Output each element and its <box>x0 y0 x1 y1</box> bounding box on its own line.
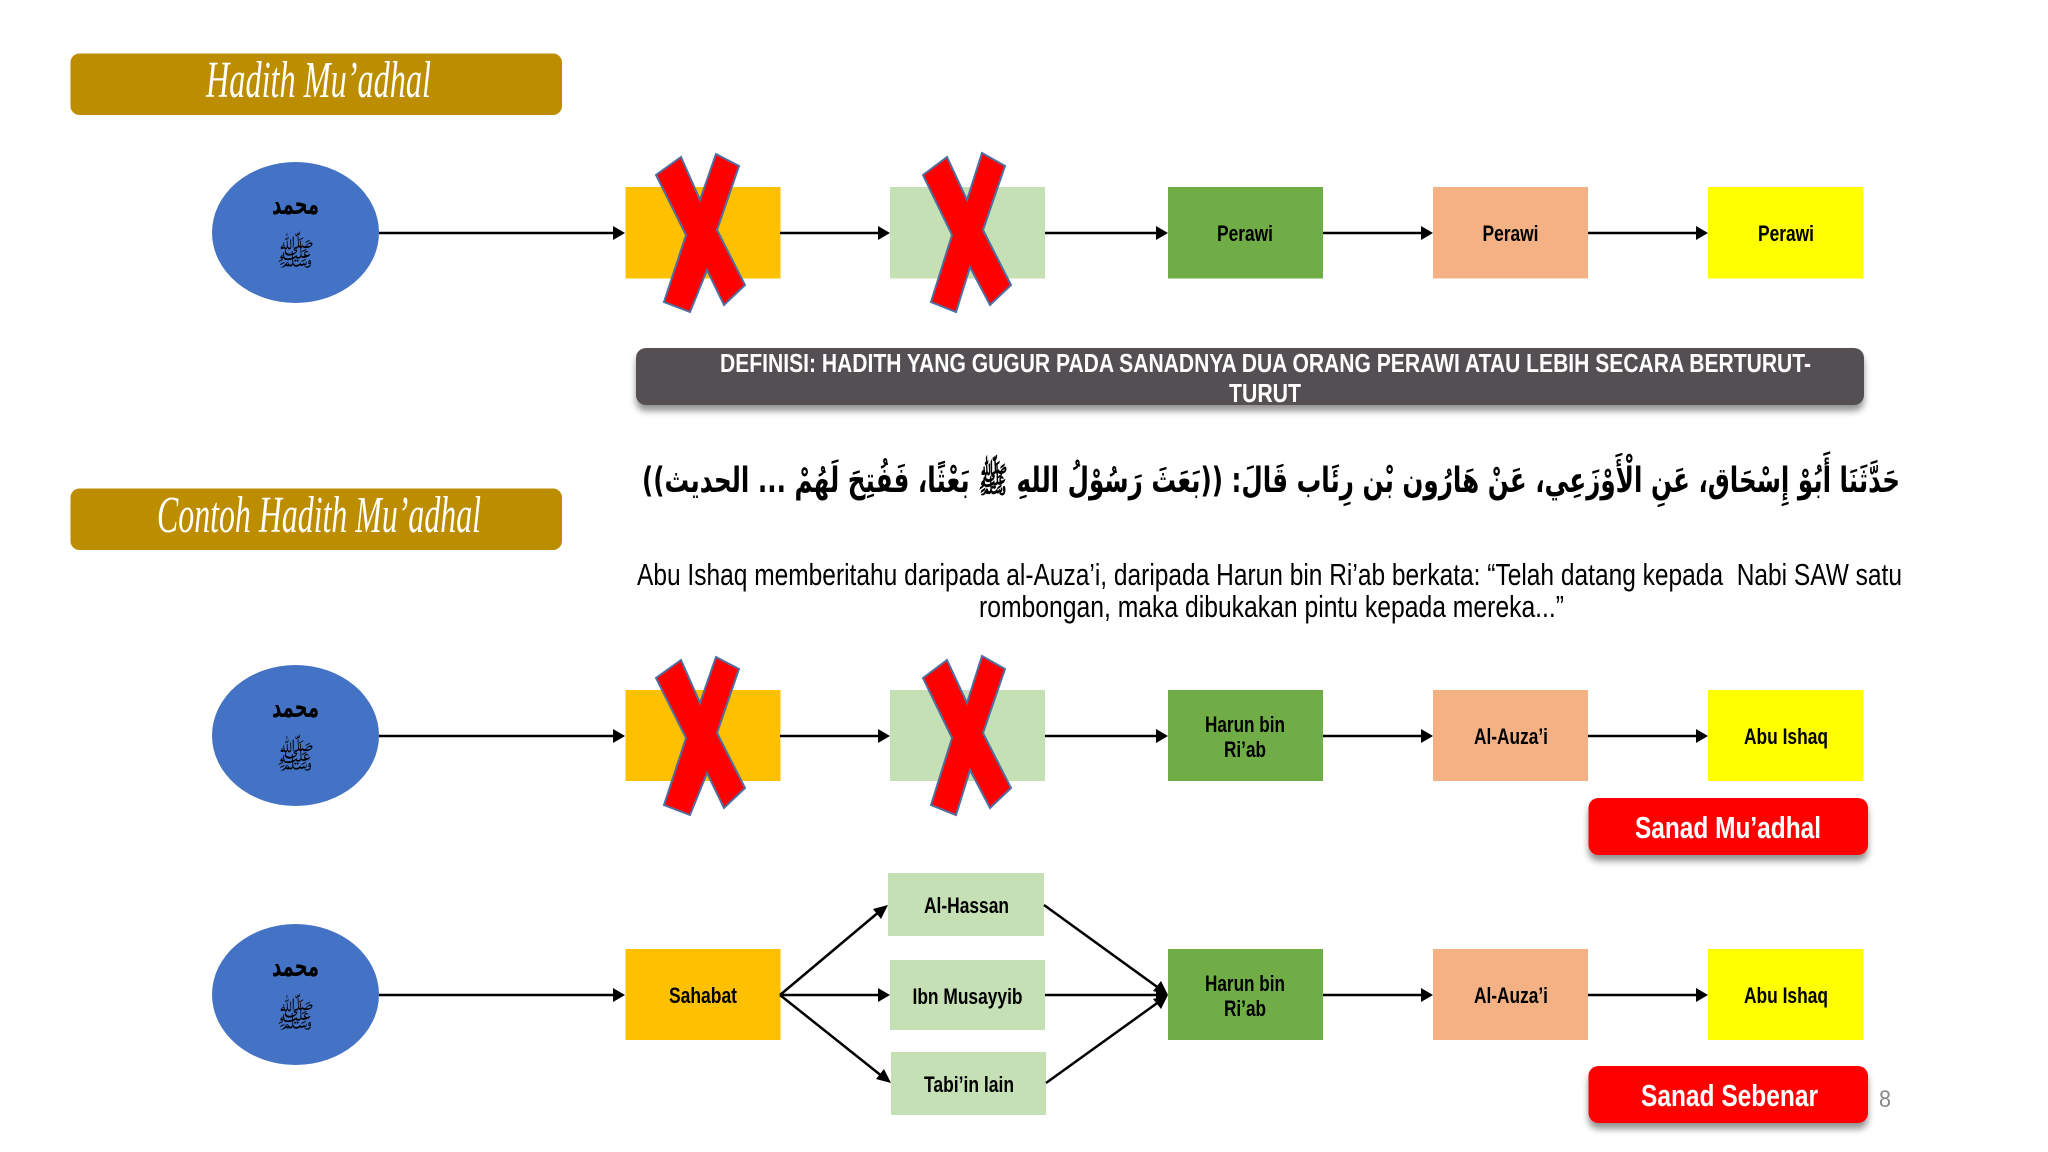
arrow: Al-Auza'i to Abu Ishaq <box>1588 729 1708 743</box>
definition bar <box>636 348 1864 408</box>
arrow: Sahabat to Ibn Musayyib <box>780 988 890 1002</box>
arrow: Tabi'in lain to Harun <box>1046 995 1168 1083</box>
arrow: Prophet to first narrator <box>379 729 625 743</box>
box: Sahabat: Sahabat <box>669 983 737 1008</box>
arrow: Sahabat to Al-Hassan <box>780 905 888 995</box>
icon: Prophet Muhammad circle: محمد <box>272 949 319 983</box>
title: Hadith Mu'adhal <box>70 52 562 115</box>
box: Perawi peach <box>1433 187 1588 278</box>
arrow: Sahabat to Tabi'in lain <box>780 995 891 1083</box>
icon: Prophet Muhammad circle: ﷺ <box>276 231 315 273</box>
icon: Prophet Muhammad circle: ﷺ <box>276 734 315 776</box>
box: Harun bin Ri'ab: Harun bin <box>1205 971 1285 996</box>
arrow: Al-Hassan to Harun <box>1044 905 1168 995</box>
box: Abu Ishaq <box>1708 949 1864 1040</box>
box: Tabi'in lain: Tabi’in lain <box>924 1072 1014 1097</box>
box: Al-Hassan <box>888 873 1044 936</box>
box: Al-Auza'i <box>1433 690 1588 781</box>
arrow: Al-Auza'i to Abu Ishaq <box>1588 988 1708 1002</box>
icon: red cross 2 <box>923 153 1011 312</box>
box: Harun bin Ri'ab: Ri’ab <box>1224 737 1266 762</box>
arrow: narrator 1 to 2 <box>780 226 890 240</box>
box: Perawi green <box>1168 187 1323 278</box>
label: Sanad Sebenar: Sanad Sebenar <box>1641 1078 1818 1113</box>
box: Ibn Musayyib: Ibn Musayyib <box>912 984 1022 1009</box>
arrow: narrator 3 to 4 <box>1323 226 1433 240</box>
translation text: rombongan, maka dibukakan pintu kepada mereka...” <box>979 589 1564 624</box>
box: Abu Ishaq <box>1708 690 1864 781</box>
icon: Prophet Muhammad circle: محمد <box>272 690 319 724</box>
title: Contoh Hadith Mu'adhal <box>70 487 562 550</box>
box: Al-Auza'i: Al-Auza’i <box>1474 983 1548 1008</box>
box: Perawi yellow: Perawi <box>1758 221 1814 246</box>
arrow: Harun to Al-Auza'i <box>1323 988 1433 1002</box>
label: Sanad Sebenar <box>1588 1066 1868 1123</box>
box: Harun bin Ri'ab: Harun bin <box>1205 712 1285 737</box>
diagram: general mu'adhal chain <box>212 153 1864 312</box>
icon: red cross 1 <box>656 657 745 815</box>
box: Al-Auza'i: Al-Auza’i <box>1474 724 1548 749</box>
box: Harun bin Ri'ab <box>1168 690 1323 781</box>
arrow: Ibn Musayyib to Harun <box>1045 988 1168 1002</box>
definition bar: TURUT <box>1229 378 1301 408</box>
icon: Prophet Muhammad circle <box>212 924 379 1065</box>
box: Perawi green: Perawi <box>1217 221 1273 246</box>
icon: Prophet Muhammad circle: محمد <box>272 187 319 221</box>
box: missing narrator 2 <box>890 690 1045 781</box>
box: Al-Auza'i <box>1433 949 1588 1040</box>
box: Abu Ishaq: Abu Ishaq <box>1744 724 1828 749</box>
icon: Prophet Muhammad circle <box>212 665 379 806</box>
box: missing narrator 2 <box>890 187 1045 278</box>
icon: Prophet Muhammad circle: ﷺ <box>276 993 315 1035</box>
box: Perawi yellow <box>1708 187 1864 278</box>
box: Sahabat <box>626 949 780 1040</box>
arrow: Prophet to Sahabat <box>379 988 625 1002</box>
box: Al-Hassan: Al-Hassan <box>924 893 1009 918</box>
icon: red cross 1 <box>656 154 745 312</box>
arrow: narrator 1 to 2 <box>780 729 890 743</box>
icon: Prophet Muhammad circle <box>212 162 379 303</box>
arrow: narrator 2 to Harun <box>1045 729 1168 743</box>
box: Tabi'in lain <box>891 1052 1046 1115</box>
box: missing narrator 1 <box>626 690 780 781</box>
arrow: Harun to Al-Auza'i <box>1323 729 1433 743</box>
page number: 8 <box>1879 1086 1891 1113</box>
arrow: narrator 4 to 5 <box>1588 226 1708 240</box>
title: Hadith Mu'adhal: Hadith Mu’adhal <box>205 52 431 109</box>
box: Abu Ishaq: Abu Ishaq <box>1744 983 1828 1008</box>
box: missing narrator 1 <box>626 187 780 278</box>
arrow: narrator 2 to 3 <box>1045 226 1168 240</box>
icon: red cross 2 <box>923 656 1011 815</box>
box: Harun bin Ri'ab: Ri’ab <box>1224 996 1266 1021</box>
arrow: Prophet to first narrator <box>379 226 625 240</box>
diagram: true chain <box>212 873 1864 1115</box>
translation text <box>637 557 1902 624</box>
title: Contoh Hadith Mu'adhal: Contoh Hadith Mu’adhal <box>157 487 481 544</box>
box: Harun bin Ri'ab <box>1168 949 1323 1040</box>
box: Ibn Musayyib <box>890 960 1045 1030</box>
definition bar: DEFINISI: HADITH YANG GUGUR PADA SANADNYA DUA ORANG PERAWI ATAU LEBIH SECARA BERTURUT- <box>720 348 1811 378</box>
box: Perawi peach: Perawi <box>1482 221 1538 246</box>
label: Sanad Mu'adhal <box>1588 798 1868 855</box>
diagram: example mu'adhal chain <box>212 656 1864 815</box>
label: Sanad Mu'adhal: Sanad Mu’adhal <box>1635 810 1821 845</box>
